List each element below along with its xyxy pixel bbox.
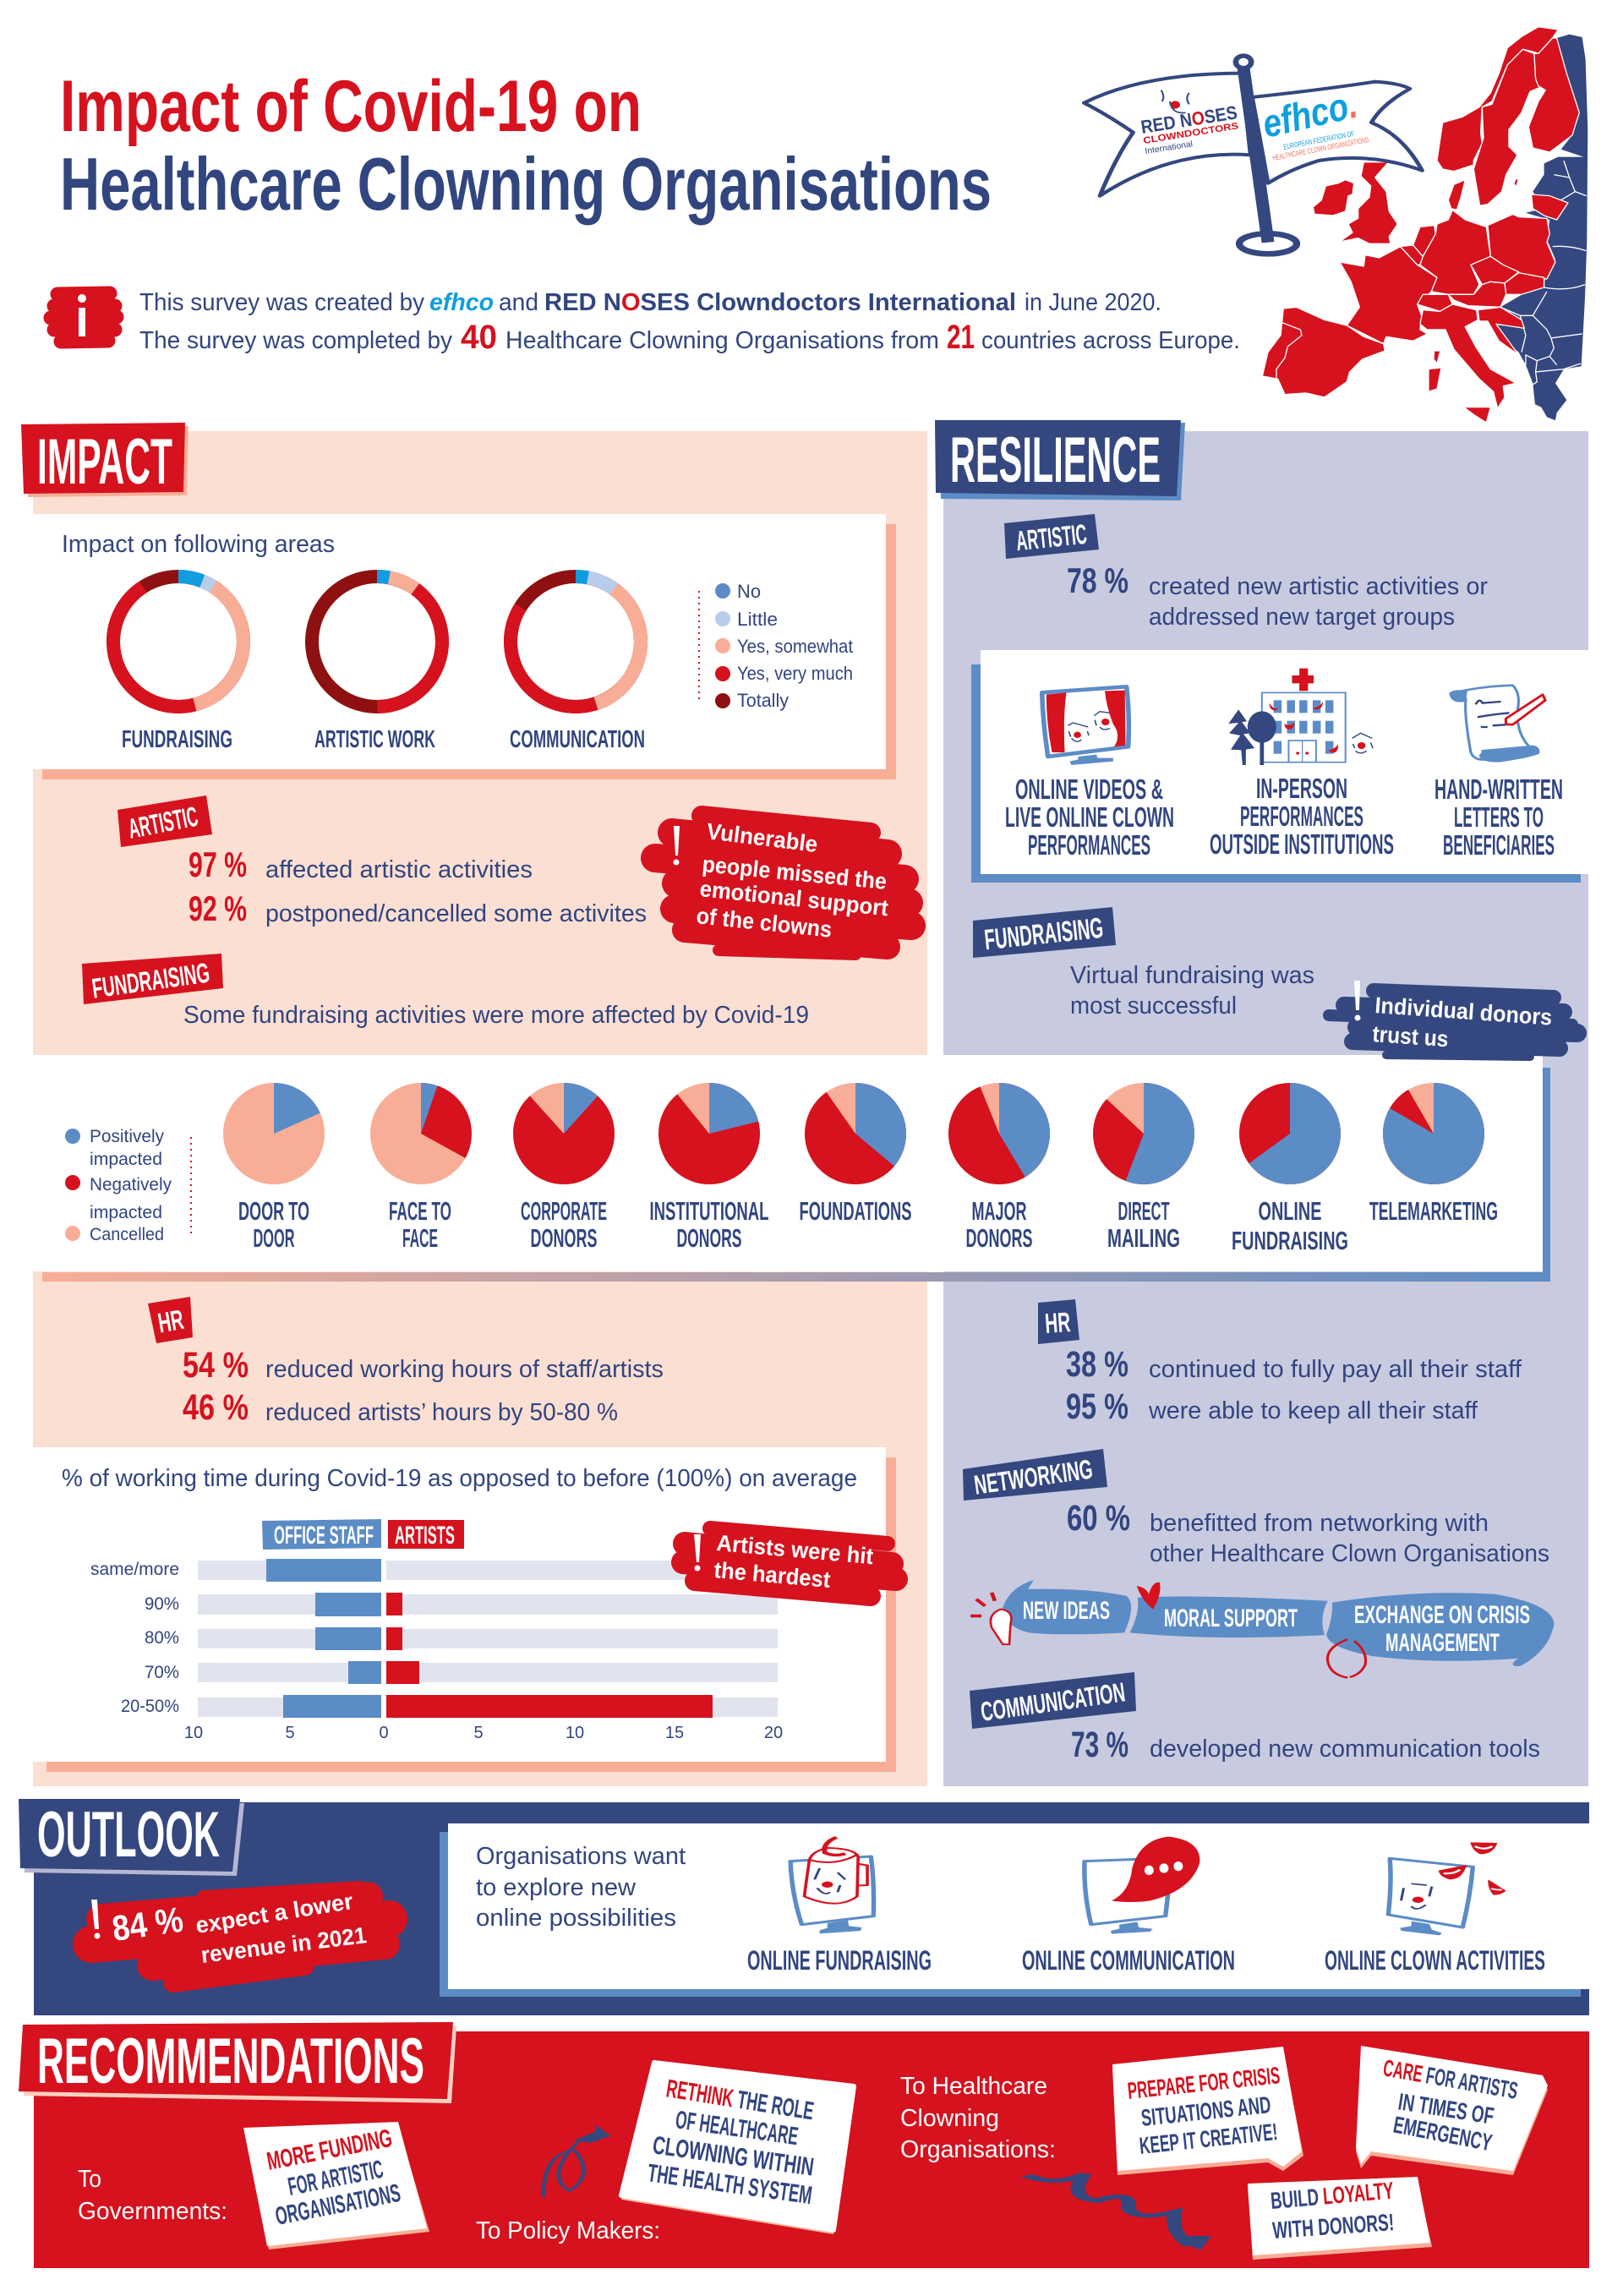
icon: info brush: [51, 293, 117, 342]
pie: telemarketing: [1369, 1108, 1498, 1226]
card: online possibilities: [440, 1823, 1589, 1997]
text: survey intro: The survey was completed by: [139, 327, 452, 354]
stat: 78 percent: created new artistic activities or: [1149, 573, 1488, 600]
bar legend tags: OFFICE STAFF: [274, 1522, 374, 1550]
tag: artistic (impact): ARTISTIC: [126, 801, 200, 845]
donut legend: [699, 581, 853, 711]
pie: telemarketing: TELEMARKETING: [1369, 1196, 1498, 1226]
donut: communication: [511, 577, 641, 707]
note: care for artists: CARE FOR ARTISTS: [1381, 2054, 1520, 2104]
callout: individual donors: trust us: [1372, 1021, 1449, 1052]
logo flag: HEALTHCARE CLOWN ORGANIZATIONS: [1271, 135, 1369, 162]
donut legend: Yes, somewhat: [737, 636, 853, 657]
title: Healthcare Clowning Organisations: [60, 142, 992, 226]
tag: hr (impact): HR: [156, 1304, 186, 1338]
callout: artists hit hardest: [683, 1528, 896, 1596]
band shadow: [42, 1068, 1550, 1282]
panel: outlook: [19, 1799, 1589, 2015]
tag: communication: COMMUNICATION: [979, 1676, 1127, 1727]
ribbon: networking benefits: [970, 1580, 1554, 1678]
text: survey intro: and: [499, 289, 538, 316]
callout: artists hit hardest: the hardest: [713, 1557, 832, 1593]
pie: online fundraising: FUNDRAISING: [1232, 1226, 1348, 1255]
text: survey intro: Healthcare Clowning Organisations from: [505, 327, 939, 354]
text: to healthcare clowning organisations: To Healthcare: [900, 2073, 1047, 2100]
pie: online fundraising: ONLINE: [1258, 1196, 1322, 1226]
stats: artistic impact: postponed/cancelled some activites: [265, 900, 647, 927]
note: more funding: FOR ARTISTIC: [286, 2156, 385, 2201]
logo flag: RED NOSES: [1139, 101, 1238, 138]
pie: direct mailing: DIRECT: [1118, 1196, 1170, 1226]
stat: 60 percent: [1067, 1498, 1549, 1567]
stats: artistic impact: [189, 845, 647, 928]
logo flag: efhco.: [1259, 82, 1361, 146]
heading tag: impact: [21, 423, 189, 498]
icon: monitor with mug: [790, 1837, 874, 1933]
stat: 73 percent: [1071, 1725, 1540, 1765]
note: more funding: MORE FUNDING: [265, 2124, 395, 2176]
card labels: ONLINE COMMUNICATION: [1022, 1945, 1235, 1976]
text: to healthcare clowning organisations: Organisations:: [900, 2136, 1056, 2163]
bar chart: 15: [665, 1724, 684, 1742]
legend: pies: impacted: [90, 1203, 162, 1222]
icon: scroll and pen: [1449, 686, 1545, 763]
legend: pies: impacted: [90, 1150, 162, 1169]
legend: pies: Cancelled: [90, 1225, 164, 1244]
format labels: OUTSIDE INSTITUTIONS: [1210, 828, 1394, 860]
card text: [476, 1843, 686, 1932]
bar chart: 10: [184, 1724, 203, 1742]
ribbon: networking benefits: MANAGEMENT: [1385, 1629, 1500, 1657]
text: survey intro: [139, 289, 1240, 356]
callout: expected revenue: revenue in 2021: [199, 1922, 368, 1968]
text: survey intro: 21: [947, 319, 975, 356]
note: rethink: THE HEALTH SYSTEM: [646, 2159, 814, 2210]
stats: artistic impact: affected artistic activities: [265, 856, 533, 883]
heading tag: impact: IMPACT: [37, 426, 172, 498]
callout: individual donors: [1329, 981, 1577, 1057]
heading tag: outlook: [19, 1799, 244, 1876]
heading tag: recommendations: [19, 2022, 456, 2103]
title: Impact of Covid-19 on: [60, 66, 642, 147]
heading tag: recommendations: RECOMMENDATIONS: [37, 2025, 424, 2097]
panel: new artistic formats: [971, 650, 1588, 883]
pie: face to face: [389, 1108, 451, 1253]
pie: door to door: [238, 1108, 309, 1253]
stats: hr impact: 46 %: [183, 1387, 249, 1428]
callout: artists hit hardest: Artists were hit: [715, 1530, 874, 1569]
text: to healthcare clowning organisations: Clowning: [900, 2105, 999, 2132]
text: survey intro: efhco: [429, 289, 494, 316]
note: build loyalty: WITH DONORS!: [1271, 2209, 1395, 2244]
stats: hr impact: reduced working hours of staff/artists: [265, 1356, 664, 1383]
callout: expected revenue: [91, 1887, 389, 1982]
ribbon: networking benefits: MORAL SUPPORT: [1164, 1604, 1298, 1632]
stat: 73 percent: developed new communication tools: [1150, 1736, 1540, 1763]
pie: major donors: MAJOR: [972, 1196, 1026, 1226]
panel: recommendations: [19, 2022, 1589, 2268]
stat: 60 percent: other Healthcare Clown Organisations: [1150, 1540, 1549, 1567]
stat: 73 percent: 73 %: [1071, 1725, 1128, 1765]
pie: face to face: FACE: [402, 1223, 438, 1253]
pie: foundations: FOUNDATIONS: [800, 1196, 911, 1226]
bar chart: 0: [379, 1724, 389, 1742]
callout: expected revenue: expect a lower: [194, 1889, 355, 1938]
pie: institutional donors: INSTITUTIONAL: [649, 1196, 769, 1226]
text: virtual fundraising: most successful: [1070, 992, 1237, 1020]
bar chart: 5: [285, 1724, 295, 1742]
bar chart: 20-50%: [121, 1697, 179, 1716]
text: to governments: Governments:: [78, 2198, 227, 2225]
stat: 60 percent: benefitted from networking with: [1150, 1510, 1489, 1537]
text: survey intro: 40: [461, 319, 497, 356]
note: care for artists: [1356, 2046, 1548, 2175]
text: survey intro: RED NOSES Clowndoctors International: [544, 289, 1016, 316]
pie: direct mailing: MAILING: [1107, 1223, 1180, 1253]
stat: 78 percent: 78 %: [1067, 560, 1128, 600]
note: more funding: ORGANISATIONS: [273, 2179, 403, 2231]
title: [60, 66, 992, 226]
donut labels: ARTISTIC WORK: [314, 726, 435, 753]
tag: fundraising (resilience): FUNDRAISING: [983, 912, 1105, 956]
callout: vulnerable people: of the clowns: [695, 903, 833, 943]
ribbon shape and icons: [970, 1580, 1554, 1678]
stats: hr impact: [183, 1345, 664, 1428]
tag: fundraising (resilience): [973, 907, 1116, 958]
donut legend: Little: [737, 609, 778, 630]
tag: communication: [970, 1672, 1136, 1729]
legend: pies: Positively: [90, 1127, 164, 1146]
format labels: IN-PERSON: [1256, 773, 1347, 804]
note: rethink: OF HEALTHCARE: [674, 2106, 800, 2151]
tag: fundraising (impact): [82, 954, 223, 1004]
text: virtual fundraising: [1070, 962, 1314, 1020]
pie: online fundraising: [1232, 1108, 1348, 1255]
tag: hr (impact): [148, 1297, 193, 1343]
icon: online video monitor: [1042, 686, 1128, 765]
stat: 78 percent: [1067, 560, 1488, 631]
text: survey intro: This survey was created by: [139, 289, 424, 316]
pie: corporate donors: [521, 1108, 607, 1253]
chart heading: % of working time during Covid-19 as opposed to before (100%) on average: [62, 1465, 857, 1492]
pie: corporate donors: DONORS: [531, 1223, 597, 1253]
pie: direct mailing: [1107, 1108, 1180, 1253]
text: to governments: [78, 2166, 227, 2225]
stat: 60 percent: 60 %: [1067, 1498, 1130, 1539]
ribbon: networking benefits: NEW IDEAS: [1023, 1597, 1110, 1625]
panel: impact on following areas: [33, 514, 896, 779]
fundraising white band: [0, 1055, 1543, 1271]
note: more funding: [243, 2122, 429, 2250]
pie: foundations: [800, 1108, 911, 1226]
heading tag: outlook: OUTLOOK: [37, 1799, 220, 1871]
note: prepare for crisis: [1112, 2047, 1303, 2175]
bar chart: 20: [764, 1724, 783, 1742]
arrow: to policy makers: [544, 2124, 610, 2196]
bar chart: 5: [473, 1724, 484, 1742]
heading tag: resilience: [935, 420, 1185, 500]
format labels: PERFORMANCES: [1028, 829, 1150, 861]
bar chart: 80%: [145, 1628, 179, 1648]
heading tag: resilience: RESILIENCE: [950, 424, 1161, 496]
stats: hr impact: 54 %: [183, 1345, 249, 1386]
note: rethink: [621, 2063, 854, 2234]
panel: impact background: [33, 431, 927, 1786]
stats: artistic impact: 92 %: [189, 888, 247, 928]
card labels: [747, 1945, 1545, 1976]
card labels: ONLINE FUNDRAISING: [747, 1945, 932, 1976]
pie: major donors: [965, 1108, 1033, 1253]
donut labels: COMMUNICATION: [510, 726, 645, 753]
donut: fundraising: [113, 577, 243, 707]
tag: artistic (resilience): ARTISTIC: [1014, 518, 1089, 556]
text: to healthcare clowning organisations: [900, 2073, 1056, 2163]
bar chart: same/more: [90, 1560, 179, 1579]
stat: 78 percent: addressed new target groups: [1149, 604, 1455, 631]
flag shapes: [1084, 56, 1422, 254]
note: build loyalty: [1248, 2177, 1432, 2260]
callout: vulnerable people: [655, 816, 911, 954]
donut legend: Yes, very much: [737, 663, 853, 684]
icon: hospital with clown: [1228, 669, 1373, 765]
bar legend tags: ARTISTS: [395, 1522, 455, 1550]
text: fundraising activities: Some fundraising activities were more affected by Covid-19: [183, 1002, 809, 1029]
format labels: LIVE ONLINE CLOWN: [1005, 801, 1174, 833]
note: prepare for crisis: KEEP IT CREATIVE!: [1138, 2118, 1279, 2159]
bar chart: 90%: [145, 1594, 179, 1614]
tag: networking: [963, 1449, 1107, 1501]
note: care for artists: IN TIMES OF: [1396, 2088, 1496, 2129]
stats: artistic impact: 97 %: [189, 845, 247, 884]
stats: hr resilience: were able to keep all their staff: [1148, 1397, 1478, 1424]
format labels: LETTERS TO: [1454, 801, 1544, 833]
tag: networking: NETWORKING: [972, 1453, 1095, 1501]
note: build loyalty: BUILD LOYALTY: [1270, 2177, 1395, 2214]
legend: pies: Negatively: [90, 1175, 172, 1194]
stats: hr resilience: 38 %: [1066, 1344, 1128, 1385]
donut legend: Totally: [737, 690, 789, 711]
map of Europe: [1262, 27, 1587, 423]
stats: hr resilience: 95 %: [1066, 1386, 1128, 1427]
icon: monitor with speech bubble: [1085, 1837, 1199, 1934]
panel: working time chart: [33, 1447, 896, 1772]
bar chart: 70%: [145, 1663, 179, 1682]
stats: hr impact: reduced artists’ hours by 50-80 %: [265, 1399, 618, 1426]
logo flag: [1084, 56, 1422, 254]
callout: individual donors: Individual donors: [1374, 992, 1553, 1030]
donut labels: [122, 726, 645, 753]
donut: artistic work: [312, 577, 442, 707]
logo flag: EUROPEAN FEDERATION OF: [1282, 129, 1355, 151]
logo flag: International: [1145, 139, 1194, 156]
panel: resilience background: [943, 431, 1588, 1786]
chart heading: Impact on following areas: [62, 531, 335, 558]
legend: pies: [65, 1127, 191, 1244]
logo flag: CLOWNDOCTORS: [1143, 121, 1239, 146]
format labels: [1005, 773, 1563, 861]
card text: to explore new: [476, 1874, 637, 1901]
icon: monitor with clown: [1388, 1842, 1506, 1935]
text: to governments: To: [78, 2166, 101, 2193]
callout: vulnerable people: people missed the: [701, 851, 888, 894]
pie: face to face: FACE TO: [389, 1196, 451, 1226]
pie: institutional donors: DONORS: [676, 1223, 742, 1253]
pie: major donors: DONORS: [965, 1223, 1033, 1253]
tag: hr (resilience): [1038, 1299, 1079, 1344]
bar chart: 10: [566, 1724, 584, 1742]
pie: door to door: DOOR TO: [238, 1196, 309, 1226]
note: care for artists: EMERGENCY: [1391, 2111, 1495, 2156]
callout: vulnerable people: Vulnerable: [705, 818, 819, 857]
pie: corporate donors: CORPORATE: [521, 1196, 607, 1226]
text: survey intro: countries across Europe.: [981, 327, 1240, 354]
text: to policy makers: To Policy Makers:: [476, 2217, 660, 2244]
pie: door to door: DOOR: [254, 1223, 294, 1253]
note: rethink: CLOWNING WITHIN: [651, 2131, 816, 2182]
note: rethink: RETHINK THE ROLE: [664, 2075, 816, 2125]
donut labels: FUNDRAISING: [122, 726, 232, 753]
note: prepare for crisis: PREPARE FOR CRISIS: [1126, 2062, 1281, 2104]
stats: hr resilience: continued to fully pay all their staff: [1149, 1356, 1522, 1383]
tag: hr (resilience): HR: [1044, 1306, 1072, 1339]
card text: online possibilities: [476, 1905, 676, 1932]
text: virtual fundraising: Virtual fundraising was: [1070, 962, 1314, 989]
stats: hr resilience: [1066, 1344, 1522, 1427]
note: prepare for crisis: SITUATIONS AND: [1139, 2091, 1272, 2131]
text: survey intro: in June 2020.: [1025, 289, 1161, 316]
card text: Organisations want: [476, 1843, 686, 1870]
format labels: ONLINE VIDEOS &: [1015, 774, 1163, 805]
tag: artistic (resilience): [1004, 514, 1099, 559]
tag: artistic (impact): [117, 795, 212, 847]
pie: institutional donors: [649, 1108, 769, 1253]
bar chart: [90, 1559, 783, 1742]
donut legend: No: [737, 581, 761, 602]
arrow: wavy to notes: [1027, 2174, 1211, 2250]
format labels: PERFORMANCES: [1240, 801, 1363, 832]
tag: fundraising (impact): FUNDRAISING: [90, 957, 211, 1004]
callout: expected revenue: 84 %: [110, 1900, 185, 1949]
callout: vulnerable people: emotional support: [698, 876, 889, 921]
